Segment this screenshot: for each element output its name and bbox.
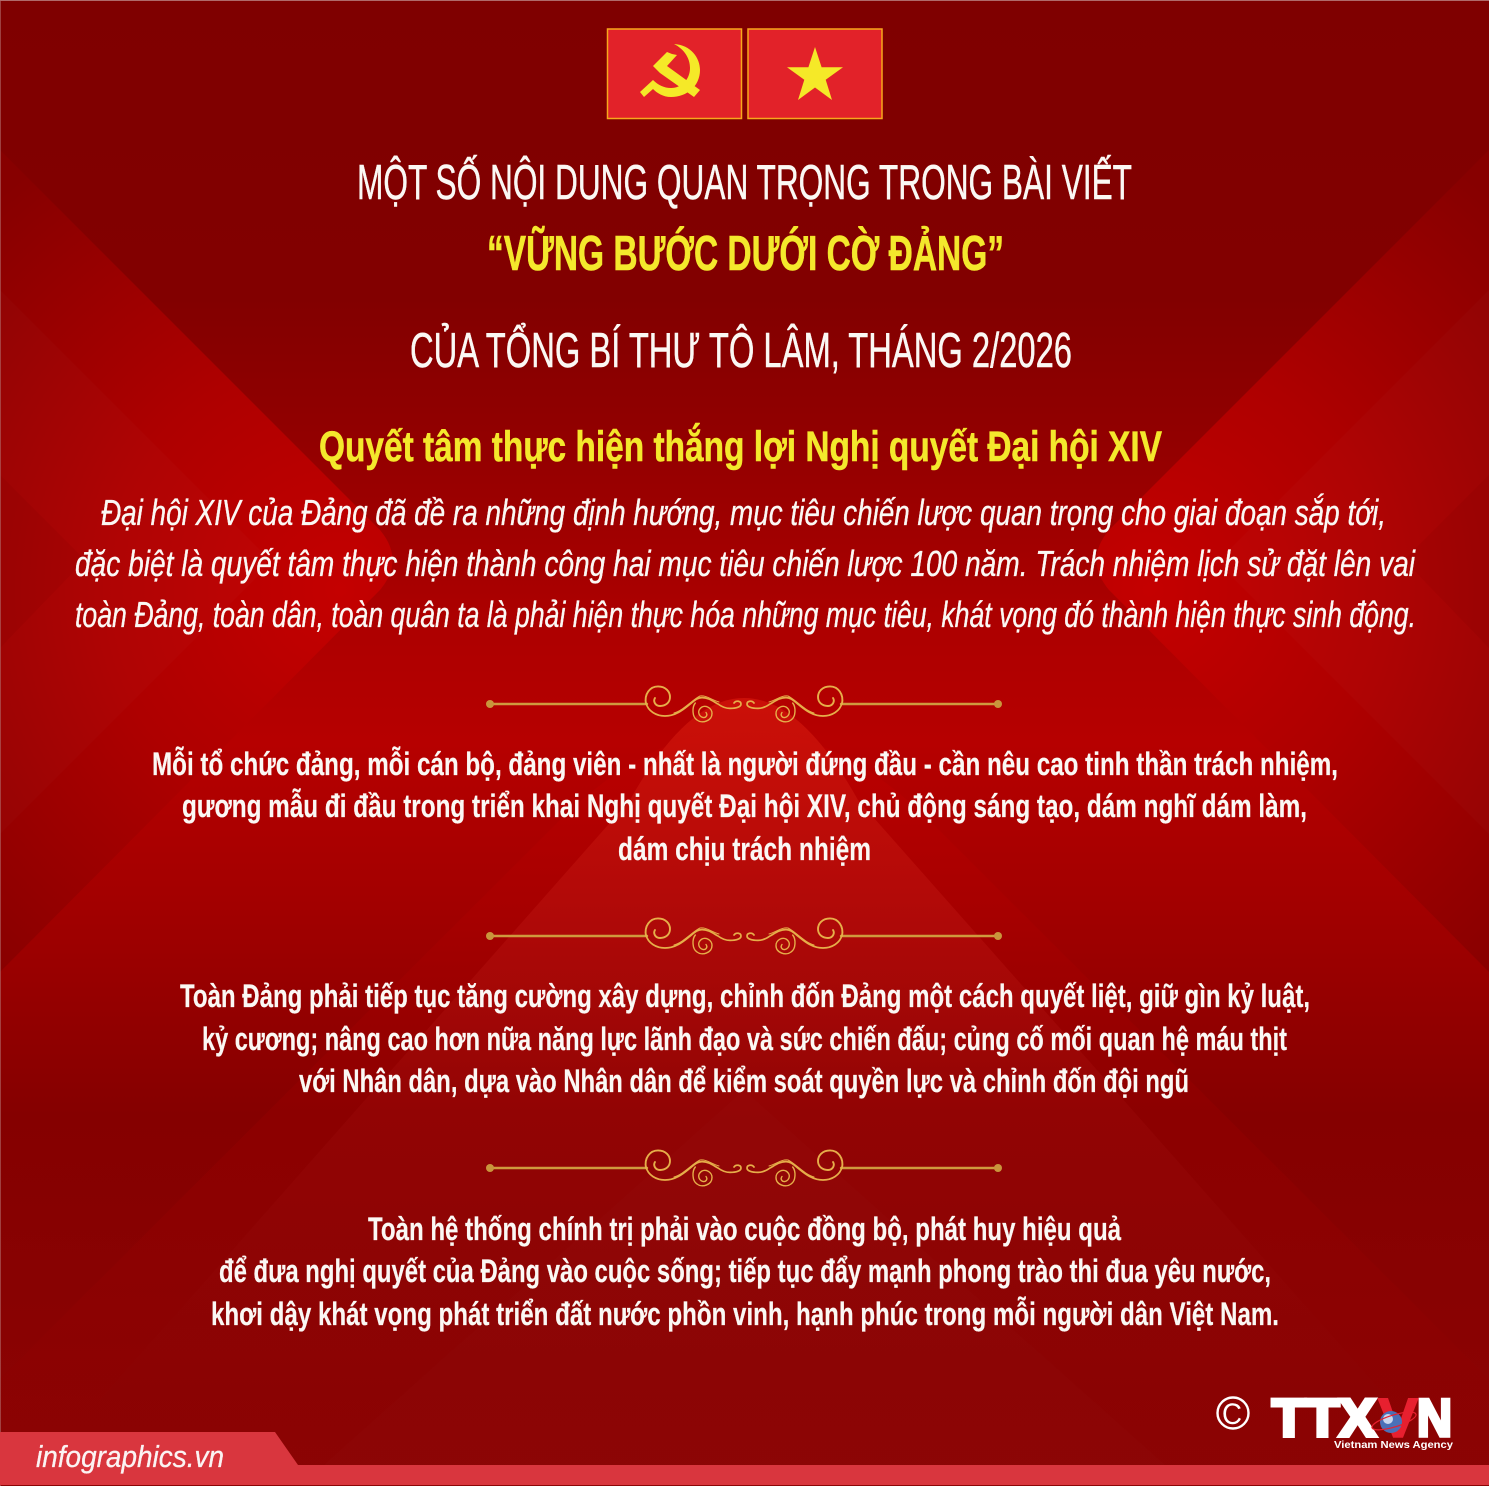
logo: TTXVN: V <box>1378 1386 1418 1449</box>
footer site name: infographics.vn <box>36 1439 224 1474</box>
title: CỦA TỔNG BÍ THƯ TÔ LÂM, THÁNG 2/2026 <box>410 323 1072 378</box>
text block 3: Toàn hệ thống chính trị phải vào cuộc đồng bộ, phát huy hiệu quả <box>368 1211 1121 1247</box>
icon: star <box>787 47 843 100</box>
logo: TTXVN: TTX <box>1272 1389 1376 1448</box>
title: “VỮNG BƯỚC DƯỚI CỜ ĐẢNG” <box>487 226 1004 281</box>
text block 2 <box>180 978 1310 1099</box>
divider ornament 1 <box>486 686 1002 722</box>
divider ornament 2 <box>486 918 1002 954</box>
logo: TTXVN: Vietnam News Agency <box>1334 1439 1453 1451</box>
logo: TTXVN <box>1272 1386 1453 1451</box>
logo: TTXVN: N <box>1417 1389 1452 1448</box>
text block 1: dám chịu trách nhiệm <box>618 831 871 867</box>
flag: Vietnam <box>748 29 882 118</box>
divider ornament 3 <box>486 1150 1002 1186</box>
footer band <box>0 1432 1489 1485</box>
flag: Communist Party <box>608 29 742 118</box>
intro paragraph <box>75 492 1416 635</box>
icon: copyright <box>1218 1398 1248 1431</box>
icon: hammer and sickle <box>640 44 700 97</box>
icon: copyright: C <box>1222 1398 1242 1431</box>
text block 3 <box>211 1211 1279 1332</box>
text block 1 <box>152 746 1338 867</box>
title <box>357 155 1132 378</box>
text block 2: với Nhân dân, dựa vào Nhân dân để kiểm soát quyền lực và chỉnh đốn đội ngũ <box>299 1063 1189 1099</box>
heading: Quyết tâm thực hiện thắng lợi Nghị quyết Đại hội XIV <box>319 422 1162 471</box>
